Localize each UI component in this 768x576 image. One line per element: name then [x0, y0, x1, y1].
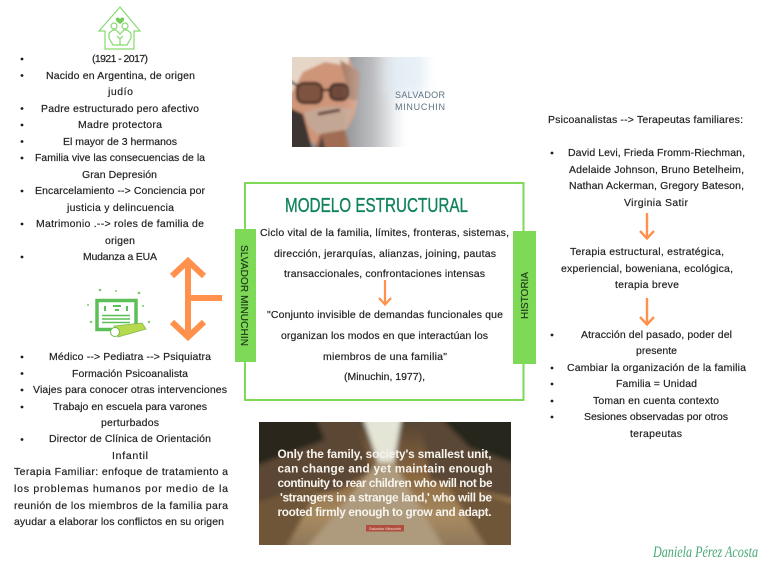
- list: therapists: David Levi, Frieda Fromm-Riechman,: [568, 147, 745, 159]
- image: family quote over road: rooted firmly enough to grow and adapt.: [278, 505, 492, 519]
- list: career: Formación Psicoanalista: [72, 368, 188, 380]
- list: principles: Familia = Unidad: [616, 378, 697, 390]
- image: family quote over road: Only the family, society's smallest unit,: [278, 447, 492, 461]
- list: biography: Madre protectora: [78, 119, 162, 131]
- photo: Salvador Minuchin: [292, 57, 444, 147]
- list: biography: El mayor de 3 hermanos: [63, 136, 177, 148]
- list: principles: Cambiar la organización de la familia: [567, 362, 746, 374]
- text: key concepts: Ciclo vital de la familia, límites, fronteras, sistemas,: [260, 227, 509, 239]
- panel: modelo estructural: [245, 183, 524, 400]
- list: biography: Gran Depresión: [82, 169, 157, 181]
- image: family quote over road: continuity to rear children who will not be: [278, 476, 493, 490]
- arrow: concepts to definition: [379, 280, 391, 304]
- text: family therapy definition: reunión de los miembros de la familia para: [14, 500, 228, 512]
- list: biography: Nacido en Argentina, de origen: [46, 70, 195, 82]
- text: minuchin quote: miembros de una familia": [323, 351, 447, 363]
- list: principles: Atracción del pasado, poder del: [581, 329, 732, 341]
- list: principles: terapeutas: [630, 428, 682, 440]
- list: career: Trabajo en escuela para varones: [53, 401, 207, 413]
- list: biography: Mudanza a EUA: [83, 251, 157, 263]
- text: key concepts: transaccionales, confrontaciones intensas: [284, 268, 485, 280]
- text: therapy types: terapia breve: [615, 279, 679, 291]
- text: key concepts: [260, 227, 509, 280]
- list: principles: Toman en cuenta contexto: [593, 395, 719, 407]
- text: minuchin quote: [267, 309, 503, 383]
- list: biography: (1921 - 2017): [92, 53, 148, 65]
- list: biography: judío: [107, 86, 133, 98]
- text: therapy types: Terapia estructural, estratégica,: [570, 246, 724, 258]
- text: family therapy definition: Terapia Familiar: enfoque de tratamiento a: [14, 466, 228, 478]
- image: family quote over road: Salvador Minuchin: [369, 526, 401, 531]
- list: biography: justicia y delincuencia: [66, 202, 174, 214]
- list: biography: Padre estructurado pero afectivo: [41, 103, 199, 115]
- text: family therapy definition: ayudar a elaborar los conflictos en su origen: [14, 516, 224, 528]
- list: career: Viajes para conocer otras intervenciones: [33, 384, 227, 396]
- list: biography: Familia vive las consecuencias de la: [35, 152, 205, 164]
- list: therapists: Virginia Satir: [624, 197, 688, 209]
- list: career: [21, 351, 227, 462]
- list: principles: [551, 329, 746, 440]
- photo: Salvador Minuchin: SALVADOR: [395, 90, 446, 100]
- icon: house with family: [99, 7, 140, 49]
- list: biography: [21, 53, 205, 263]
- list: therapists: Nathan Ackerman, Gregory Bateson,: [569, 180, 744, 192]
- list: career: Médico --> Pediatra --> Psiquiatra: [49, 351, 211, 363]
- text: minuchin quote: organizan los modos en que interactúan los: [281, 330, 488, 342]
- list: career: Director de Clínica de Orientación: [49, 433, 211, 445]
- image: family quote over road: 'strangers in a strange land,' who will be: [280, 490, 492, 504]
- tab: salvador minuchin: SLVADOR MINUCHIN: [238, 245, 249, 346]
- list: biography: Encarcelamiento --> Conciencia por: [35, 185, 206, 197]
- text: key concepts: dirección, jerarquías, alianzas, joining, pautas: [274, 248, 496, 260]
- text: family therapy definition: [14, 466, 228, 528]
- tab: historia: [513, 231, 536, 364]
- text: family therapy definition: los problemas humanos por medio de la: [14, 483, 228, 495]
- icon: diploma: [87, 289, 150, 337]
- list: therapists: [551, 147, 745, 209]
- list: career: Infantil: [112, 450, 148, 462]
- arrow: therapists to therapies: [640, 213, 654, 238]
- photo: Salvador Minuchin: MINUCHIN: [395, 102, 445, 112]
- image: family quote over road: [259, 422, 511, 545]
- list: principles: Sesiones observadas por otros: [584, 411, 728, 423]
- tab: historia: HISTORIA: [520, 272, 531, 319]
- text: therapy types: [561, 246, 733, 291]
- arrow: therapies to principles: [640, 298, 654, 324]
- image: family quote over road: can change and yet maintain enough: [278, 462, 492, 476]
- text: psicoanalistas heading: Psicoanalistas --> Terapeutas familiares:: [548, 114, 743, 126]
- arrow: orange double-headed connector: [172, 261, 222, 337]
- heading: modelo estructural: MODELO ESTRUCTURAL: [285, 195, 468, 217]
- text: minuchin quote: (Minuchin, 1977),: [344, 371, 425, 383]
- tab: salvador minuchin: [235, 229, 256, 362]
- list: biography: Matrimonio .--> roles de familia de: [36, 218, 204, 230]
- list: therapists: Adelaide Johnson, Bruno Betelheim,: [569, 164, 744, 176]
- list: principles: presente: [636, 345, 677, 357]
- list: career: perturbados: [101, 417, 159, 429]
- text: therapy types: experiencial, boweniana, ecológica,: [561, 263, 733, 275]
- text: minuchin quote: "Conjunto invisible de demandas funcionales que: [267, 309, 503, 321]
- list: biography: origen: [105, 235, 135, 247]
